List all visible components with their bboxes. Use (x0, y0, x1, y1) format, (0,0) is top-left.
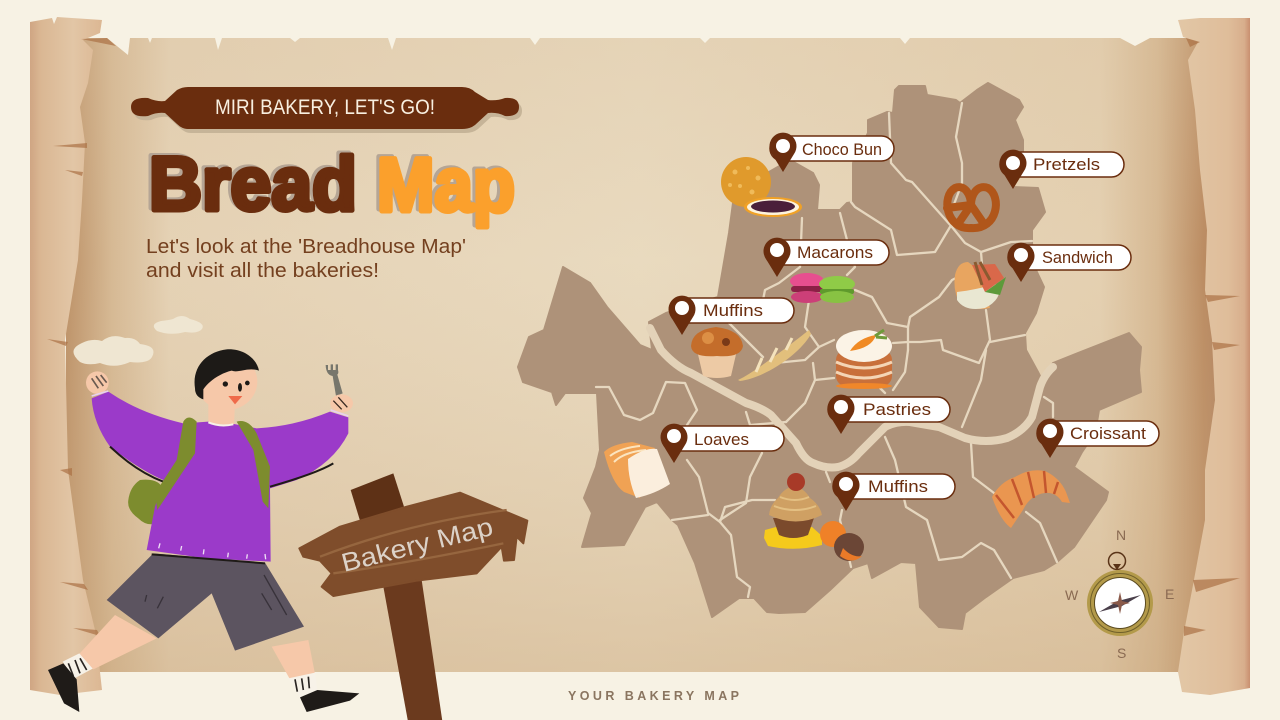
backpack straps (155, 417, 197, 510)
sign text: Bakery Map (338, 511, 496, 578)
label: Sandwich: Sandwich (1042, 248, 1113, 267)
food: muffin and baguette (691, 327, 811, 381)
label: Loaves: Loaves (694, 430, 749, 449)
signpost (299, 473, 527, 720)
title (146, 140, 515, 228)
label: Pretzels: Pretzels (1033, 155, 1100, 174)
subtitle text: and visit all the bakeries! (146, 260, 379, 282)
footer: YOUR BAKERY MAP (568, 689, 739, 703)
district lines (596, 103, 1057, 597)
neck and face (195, 349, 259, 425)
compass: N (1116, 527, 1126, 543)
food: choco buns (721, 157, 802, 217)
label: Pretzels (1000, 150, 1124, 189)
food: macarons (790, 273, 855, 303)
backpack (128, 480, 161, 524)
label: Muffins north: Muffins (703, 301, 763, 320)
title: Map (377, 143, 515, 228)
compass: S (1117, 645, 1126, 661)
title: Bread (146, 140, 354, 225)
clouds (73, 316, 203, 366)
map of districts (518, 83, 1141, 629)
title: Map (374, 141, 512, 226)
food: carrot cake (836, 330, 892, 389)
label: Macarons (764, 238, 889, 277)
compass (1065, 527, 1174, 661)
food: pretzel (947, 187, 996, 228)
compass: W (1065, 587, 1079, 603)
food: mont blanc cupcake (764, 473, 822, 549)
food: bread loaves (604, 442, 670, 498)
label: Croissant (1036, 419, 1159, 458)
legs (77, 615, 315, 679)
compass: E (1165, 586, 1174, 602)
food: sandwich (954, 262, 1006, 309)
socks and shoes (48, 653, 359, 712)
shorts (107, 553, 304, 651)
label: Macarons: Macarons (797, 243, 873, 262)
sweater (92, 392, 348, 562)
rolling pin banner: MIRI BAKERY, LET'S GO! (215, 96, 435, 119)
label: Muffins north (668, 296, 794, 335)
subtitle text: Let's look at the 'Breadhouse Map' (146, 236, 466, 258)
rolling pin banner (131, 87, 522, 133)
label: Croissant: Croissant (1070, 424, 1146, 443)
label: Muffins south (833, 472, 955, 511)
subtitle text (146, 236, 466, 282)
label: Sandwich (1008, 243, 1131, 282)
food: small pastry (820, 521, 864, 561)
label: Pastries: Pastries (863, 400, 931, 419)
river (650, 328, 1053, 468)
label: Loaves (660, 424, 784, 463)
label: Muffins south: Muffins (868, 477, 928, 496)
label: Choco Bun (770, 133, 894, 172)
character: runner with fork (48, 349, 359, 712)
label: Pastries (827, 395, 950, 434)
hands and fork (86, 364, 353, 412)
food: croissant (992, 470, 1070, 528)
title: Bread (149, 142, 357, 227)
label: Choco Bun: Choco Bun (802, 140, 882, 159)
